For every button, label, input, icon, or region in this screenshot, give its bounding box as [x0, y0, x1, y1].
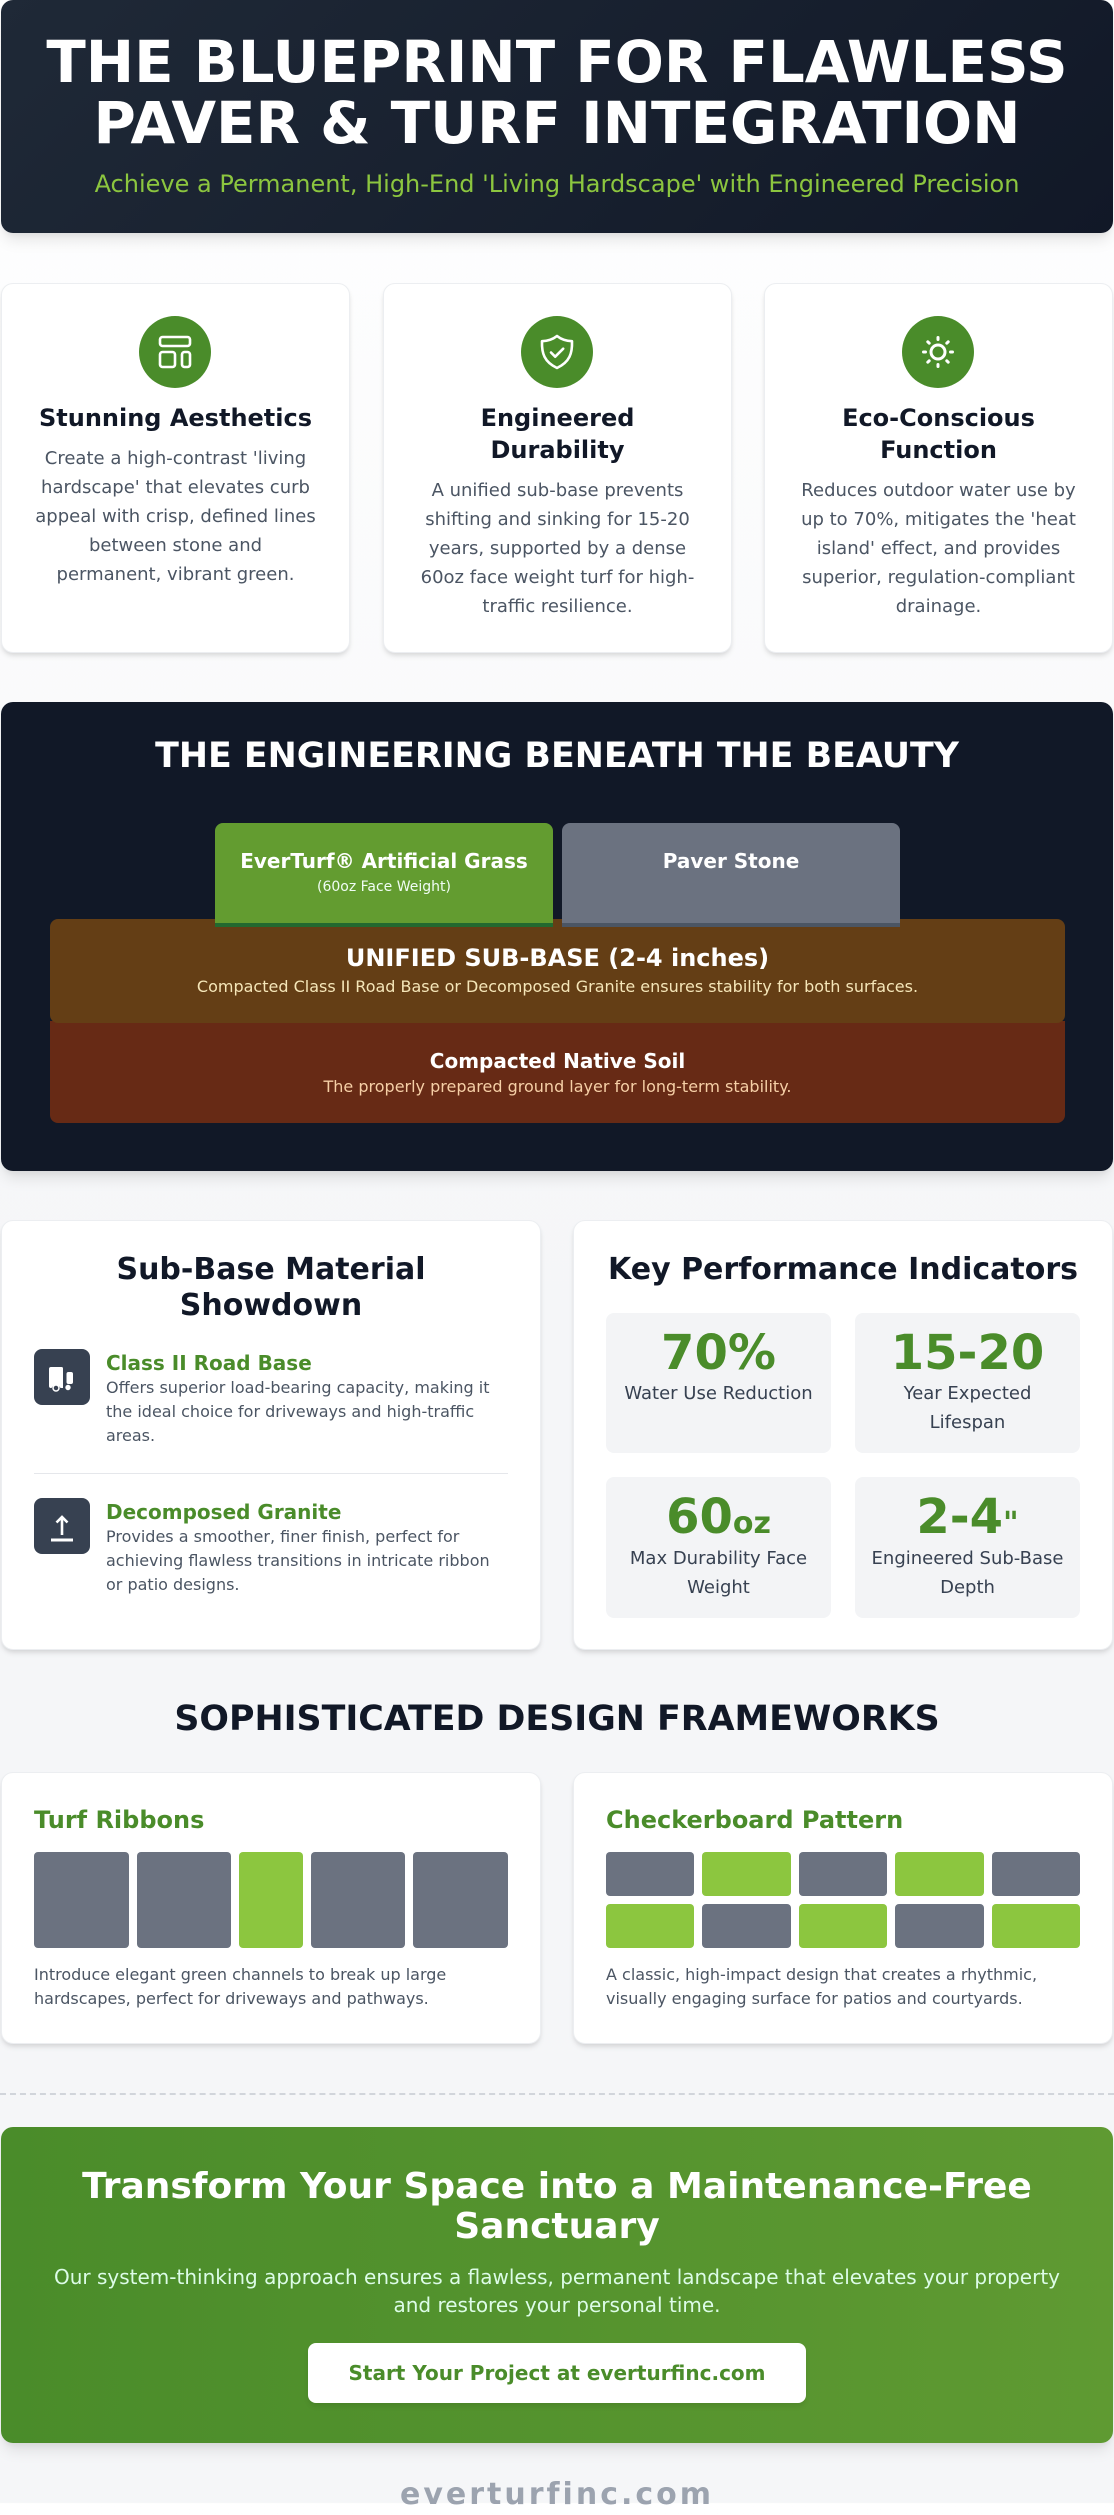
- description: Introduce elegant green channels to break up large: [34, 1965, 446, 1984]
- heading: Engineered: [481, 404, 634, 432]
- body text: 60oz face weight turf for high-: [421, 567, 694, 588]
- body text: [35, 448, 316, 585]
- sub-base label: UNIFIED SUB-BASE (2-4 inches): [346, 944, 769, 972]
- section heading: design frameworks: SOPHISTICATED DESIGN FRAMEWORKS: [174, 1699, 940, 1739]
- body text: shifting and sinking for 15-20: [425, 509, 690, 530]
- label: Engineered Sub-Base: [872, 1548, 1063, 1569]
- icon: shield check: [521, 316, 593, 388]
- body text: Create a high-contrast 'living: [45, 448, 306, 469]
- turf label: EverTurf® Artificial Grass: [240, 849, 528, 873]
- icon: sun: [902, 316, 974, 388]
- body text: years, supported by a dense: [429, 538, 686, 559]
- section heading: THE ENGINEERING BENEATH THE BEAUTY: [155, 736, 959, 776]
- heading: Function: [880, 436, 997, 464]
- description: achieving flawless transitions in intricate ribbon: [106, 1551, 490, 1570]
- description: areas.: [106, 1426, 155, 1445]
- value: 60oz: [666, 1489, 771, 1545]
- cta button: [308, 2343, 806, 2403]
- body text: appeal with crisp, defined lines: [35, 506, 316, 527]
- panel: engineering cross-section: [1, 702, 1113, 1171]
- turf weight: (60oz Face Weight): [317, 879, 451, 895]
- layer: native soil: [50, 1021, 1065, 1123]
- description: Provides a smoother, finer finish, perfect for: [106, 1527, 459, 1546]
- label: Water Use Reduction: [624, 1383, 813, 1404]
- kpi: water use: [606, 1313, 831, 1453]
- kpi: depth: [855, 1477, 1080, 1618]
- value: 15-20: [891, 1325, 1044, 1381]
- title: [46, 28, 1068, 157]
- description: Offers superior load-bearing capacity, making it: [106, 1378, 490, 1397]
- icon: layout: [139, 316, 211, 388]
- label: Max Durability Face: [630, 1548, 807, 1569]
- heading: [116, 1252, 426, 1323]
- heading: Checkerboard Pattern: [606, 1806, 903, 1834]
- call to action panel: [1, 2127, 1113, 2443]
- title: THE BLUEPRINT FOR FLAWLESS: [46, 28, 1068, 96]
- body text: [801, 480, 1076, 617]
- body text: [421, 480, 694, 617]
- cta heading: [82, 2166, 1032, 2247]
- description: [106, 1527, 490, 1594]
- heading: Showdown: [180, 1288, 362, 1323]
- footer url: everturfinc.com: [400, 2477, 714, 2512]
- heading: Turf Ribbons: [34, 1806, 204, 1834]
- description: A classic, high-impact design that creates a rhythmic,: [606, 1965, 1037, 1984]
- ribbon diagram: [34, 1852, 508, 1948]
- cta text: Our system-thinking approach ensures a flawless, permanent landscape that elevates your property: [54, 2265, 1060, 2289]
- panel: key performance indicators: [573, 1220, 1113, 1650]
- description: the ideal choice for driveways and high-traffic: [106, 1402, 474, 1421]
- cta text: [54, 2265, 1060, 2317]
- body text: up to 70%, mitigates the 'heat: [801, 509, 1076, 530]
- layer: unified sub-base: [50, 919, 1065, 1023]
- header banner: [1, 0, 1113, 233]
- icon: upload arrow: [34, 1498, 90, 1554]
- label: Weight: [687, 1577, 750, 1598]
- material: class ii road base: Class II Road Base: [106, 1351, 312, 1375]
- panel: checkerboard pattern: [573, 1772, 1113, 2044]
- label: [872, 1548, 1063, 1598]
- heading: Eco-Conscious: [842, 404, 1035, 432]
- heading: [481, 404, 634, 464]
- kpi: lifespan: [855, 1313, 1080, 1453]
- body text: hardscape' that elevates curb: [41, 477, 310, 498]
- heading: Key Performance Indicators: [608, 1252, 1078, 1287]
- subtitle: Achieve a Permanent, High-End 'Living Hardscape' with Engineered Precision: [95, 170, 1019, 198]
- label: [630, 1548, 807, 1598]
- heading: Durability: [490, 436, 624, 464]
- cta heading: Sanctuary: [454, 2206, 660, 2247]
- soil description: The properly prepared ground layer for long-term stability.: [324, 1077, 791, 1096]
- panel: sub-base material showdown: [1, 1220, 541, 1650]
- label: [904, 1383, 1031, 1433]
- description: or patio designs.: [106, 1575, 240, 1594]
- soil label: Compacted Native Soil: [430, 1049, 685, 1073]
- sub-base description: Compacted Class II Road Base or Decomposed Granite ensures stability for both surfaces.: [197, 977, 918, 996]
- paver label: Paver Stone: [663, 849, 799, 873]
- description: visually engaging surface for patios and courtyards.: [606, 1989, 1023, 2008]
- body text: Reduces outdoor water use by: [801, 480, 1076, 501]
- body text: superior, regulation-compliant: [802, 567, 1075, 588]
- heading: Stunning Aesthetics: [39, 404, 312, 432]
- body text: permanent, vibrant green.: [57, 564, 294, 585]
- heading: Sub-Base Material: [116, 1252, 426, 1287]
- description: [106, 1378, 490, 1445]
- label: Depth: [940, 1577, 995, 1598]
- panel: turf ribbons: [1, 1772, 541, 2044]
- kpi: face weight: [606, 1477, 831, 1618]
- panel: eco-conscious function: [764, 283, 1113, 653]
- icon: truck: [34, 1349, 90, 1405]
- panel: engineered durability: [383, 283, 732, 653]
- body text: A unified sub-base prevents: [432, 480, 683, 501]
- body text: traffic resilience.: [482, 596, 633, 617]
- label: Year Expected: [904, 1383, 1031, 1404]
- cta text: and restores your personal time.: [393, 2293, 721, 2317]
- label: Lifespan: [930, 1412, 1005, 1433]
- body text: island' effect, and provides: [817, 538, 1060, 559]
- material: decomposed granite: Decomposed Granite: [106, 1500, 341, 1524]
- panel: stunning aesthetics: [1, 283, 350, 653]
- value: 2-4": [916, 1489, 1019, 1545]
- cta heading: Transform Your Space into a Maintenance-Free: [82, 2166, 1032, 2207]
- checkerboard diagram: [606, 1852, 1080, 1948]
- description: [34, 1965, 446, 2008]
- value: 70%: [661, 1325, 776, 1381]
- body text: between stone and: [89, 535, 262, 556]
- cta button: Start Your Project at everturfinc.com: [348, 2361, 766, 2385]
- body text: drainage.: [896, 596, 981, 617]
- heading: [842, 404, 1035, 464]
- description: hardscapes, perfect for driveways and pathways.: [34, 1989, 429, 2008]
- title: PAVER & TURF INTEGRATION: [93, 89, 1021, 157]
- layer: paver: [562, 823, 900, 927]
- description: [606, 1965, 1037, 2008]
- layer: turf: [215, 823, 553, 927]
